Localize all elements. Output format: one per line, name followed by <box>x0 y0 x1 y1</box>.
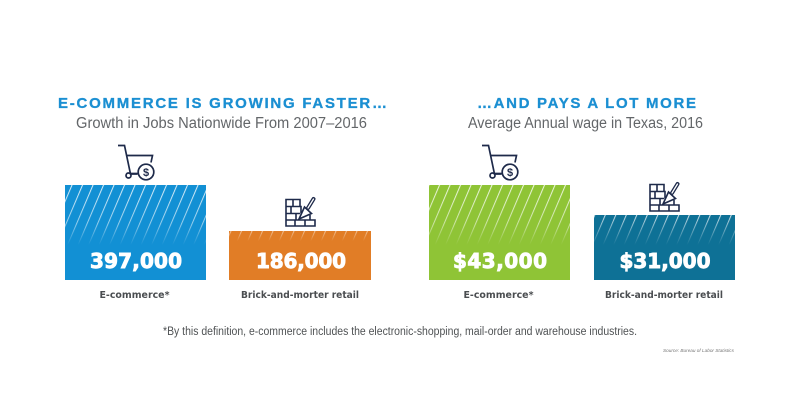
bar: brick-and-mortar wage: $31,000 <box>620 249 710 273</box>
heading: growing faster: E-COMMERCE IS GROWING FASTER… <box>58 95 387 112</box>
bar: e-commerce jobs: 397,000 <box>90 249 182 273</box>
icon: bricks and trowel <box>650 184 679 211</box>
label: e-commerce: E-commerce* <box>464 290 534 301</box>
label: brick-and-morter retail: Brick-and-morter retail <box>241 290 359 301</box>
label: brick-and-morter retail: Brick-and-morter retail <box>605 290 723 301</box>
heading: pays a lot more: …AND PAYS A LOT MORE <box>477 95 696 112</box>
panel: wages <box>429 95 735 301</box>
footnote: *By this definition, e-commerce includes the electronic-shopping, mail-order and warehouse industries. <box>163 326 637 338</box>
panel: e-commerce growth <box>58 95 387 301</box>
infographic <box>58 98 735 352</box>
subheading: growth in jobs: Growth in Jobs Nationwide From 2007–2016 <box>76 115 367 132</box>
bar: brick-and-mortar jobs: 186,000 <box>256 249 346 273</box>
bar: brick-and-mortar wage <box>594 215 735 280</box>
bar: brick-and-mortar jobs <box>229 231 371 280</box>
bar: e-commerce wage <box>429 185 570 280</box>
icon: shopping cart with dollar: $ <box>507 167 513 179</box>
icon: shopping cart with dollar <box>482 146 518 180</box>
bar: e-commerce wage: $43,000 <box>453 249 547 273</box>
source: Source: Bureau of Labor Statistics <box>663 348 735 353</box>
icon: shopping cart with dollar <box>118 146 154 180</box>
label: e-commerce: E-commerce* <box>100 290 170 301</box>
icon: shopping cart with dollar: $ <box>143 167 149 179</box>
icon: bricks and trowel <box>286 199 315 226</box>
subheading: average annual wage: Average Annual wage in Texas, 2016 <box>468 115 703 132</box>
bar: e-commerce jobs <box>65 185 206 280</box>
